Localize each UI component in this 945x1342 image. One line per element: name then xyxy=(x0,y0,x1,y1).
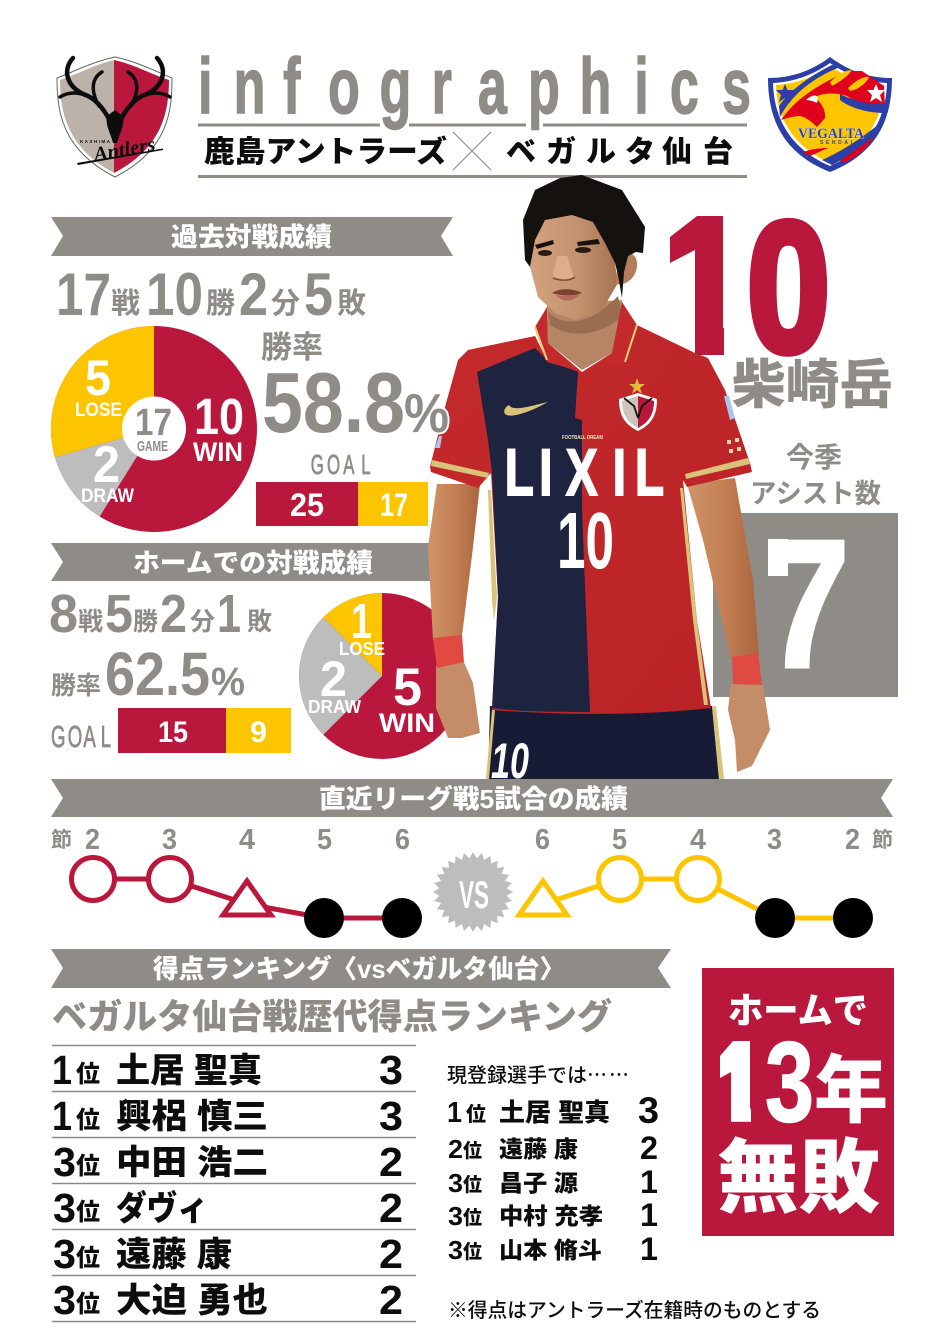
pie chart: home record: 1 xyxy=(351,595,372,649)
stat line: 8 home games record: 戦 xyxy=(78,608,103,636)
pie chart: home record: DRAW xyxy=(308,697,361,717)
stat line: 8 home games record: 8 xyxy=(49,584,78,644)
current row 2: 位 xyxy=(463,1140,482,1162)
row 4: 3 xyxy=(53,1185,76,1231)
current row 5: 1 xyxy=(640,1231,658,1267)
round number labels: 5 xyxy=(317,824,332,856)
row 6: 大迫 勇也 xyxy=(116,1282,268,1320)
round number labels: 3 xyxy=(162,824,177,856)
pie chart: overall record: WIN xyxy=(193,437,243,467)
stat line: 8 home games record xyxy=(49,584,272,644)
banner: past results: 過去対戦成績 xyxy=(171,222,332,252)
goal bar: 15 vs 9: GOAL xyxy=(51,720,111,754)
label: assists this season: アシスト数 xyxy=(750,479,881,509)
banner: scoring ranking: 得点ランキング〈vsベガルタ仙台〉 xyxy=(153,954,565,984)
banner: scoring ranking xyxy=(51,949,671,988)
pie chart: overall record: LOSE xyxy=(75,400,122,421)
banner: home results: ホームでの対戦成績 xyxy=(133,548,373,578)
shorts: 10 xyxy=(491,733,529,789)
round number labels: 3 xyxy=(767,824,782,856)
goals label: GOAL xyxy=(311,449,371,480)
round number labels: 6 xyxy=(395,824,410,856)
stat line: 8 home games record: 敗 xyxy=(247,608,272,636)
shirt sponsor LIXIL: LIXIL xyxy=(505,436,664,510)
row 2 xyxy=(52,1093,403,1139)
stat: home win rate: 勝率 xyxy=(51,672,101,700)
stat line: 17 games record: 10 xyxy=(146,261,203,328)
jersey xyxy=(430,325,752,714)
row 3: 3 xyxy=(53,1139,76,1185)
current row 4: 位 xyxy=(463,1207,482,1229)
pie chart: home record: 2 xyxy=(320,651,347,707)
stat line: 17 games record xyxy=(56,261,366,328)
footnote: ※得点はアントラーズ在籍時のものとする xyxy=(448,1299,821,1322)
pie chart: overall record: DRAW xyxy=(81,486,134,507)
current row 1: 3 xyxy=(638,1090,659,1131)
current row 4: 3 xyxy=(448,1201,463,1231)
current row 3: 昌子 源 xyxy=(499,1170,578,1196)
neck xyxy=(547,296,622,370)
stat line: 17 games record: 2 xyxy=(239,261,268,328)
stat line: 17 games record: 敗 xyxy=(337,287,366,320)
current row 2 xyxy=(448,1130,658,1166)
goal bar: 25 vs 17: 25 xyxy=(290,487,324,523)
current row 5: 3 xyxy=(448,1235,463,1265)
current row 2: 遠藤 康 xyxy=(499,1136,578,1162)
row 5: 位 xyxy=(76,1245,100,1272)
current row 1: 位 xyxy=(466,1103,486,1126)
pie chart: overall record: 2 xyxy=(93,436,120,494)
round number labels: 節 xyxy=(872,829,893,852)
row 1: 位 xyxy=(76,1061,100,1088)
table: current squad scorers xyxy=(447,1059,659,1267)
stat line: 8 home games record: 5 xyxy=(105,584,133,644)
player photo illustration xyxy=(428,175,770,789)
label: assists this season: 今季 xyxy=(786,442,842,473)
pie chart: overall record: GAME xyxy=(137,438,168,455)
assist count box: 7 xyxy=(713,501,898,706)
current row 5: 位 xyxy=(463,1241,482,1263)
round number labels: 2 xyxy=(845,824,860,856)
label: win rate: 勝率 xyxy=(261,330,323,365)
pie chart: home record: WIN xyxy=(379,708,435,738)
current row 1 xyxy=(447,1090,659,1131)
current row 3: 1 xyxy=(640,1164,658,1200)
stat: overall win rate: 58.8 xyxy=(262,356,405,451)
current row 1: 土居 聖真 xyxy=(499,1099,610,1127)
VS badge xyxy=(427,846,519,938)
stat line: 8 home games record: 2 xyxy=(160,584,187,644)
left arm xyxy=(428,484,480,738)
heading: all-time ranking: ベガルタ仙台戦歴代得点ランキング xyxy=(52,997,612,1037)
goal bar: 25 vs 17: 17 xyxy=(380,487,408,523)
pie chart: home record xyxy=(299,593,465,759)
row 2: 3 xyxy=(379,1093,403,1139)
table: current squad scorers: 現登録選手では…… xyxy=(447,1059,631,1088)
stat: home win rate: % xyxy=(211,660,245,704)
goal bar: 15 vs 9: 9 xyxy=(250,716,267,749)
row 6: 3 xyxy=(53,1277,76,1323)
crest: Vegalta Sendai xyxy=(768,57,892,172)
stat line: 17 games record: 勝 xyxy=(206,287,235,320)
table: all-time scorers xyxy=(52,1046,416,1323)
current row 4: 中村 充孝 xyxy=(499,1203,603,1229)
row 5: 3 xyxy=(53,1231,76,1277)
shorts xyxy=(486,706,724,789)
form line: Vegalta xyxy=(519,858,873,938)
row 5: 2 xyxy=(379,1231,403,1277)
callout: 13 years unbeaten at home: 13 xyxy=(716,1019,814,1146)
round number labels: 4 xyxy=(690,824,706,856)
banner: last 5 league games: 直近リーグ戦5試合の成績 xyxy=(319,784,628,814)
title: infographics: infographics xyxy=(198,42,751,131)
form line: Kashima xyxy=(72,858,422,938)
match-up heading: Kashima vs Vegalta xyxy=(204,132,733,170)
callout: 13 years unbeaten at home: 無敗 xyxy=(717,1134,880,1224)
banner: last 5 league games xyxy=(51,779,893,817)
callout: 13 years unbeaten at home: 年 xyxy=(814,1049,888,1132)
stat line: 17 games record: 戦 xyxy=(111,287,140,320)
current row 5 xyxy=(448,1231,658,1267)
stat: home win rate xyxy=(51,640,245,708)
callout: 13 years unbeaten at home: ホームで xyxy=(728,990,868,1031)
current row 5: 山本 脩斗 xyxy=(499,1237,602,1263)
right arm xyxy=(687,478,770,772)
row 1: 3 xyxy=(379,1047,403,1093)
round number labels xyxy=(51,824,893,856)
row 1: 1 xyxy=(52,1047,72,1093)
goal bar: 15 vs 9 xyxy=(51,708,291,754)
pie chart: home record: 5 xyxy=(393,658,422,717)
pie chart: overall record: 10 xyxy=(194,388,244,445)
row 3: 中田 浩二 xyxy=(116,1144,268,1182)
goal bar: 25 vs 17 xyxy=(256,482,428,526)
stat line: 17 games record: 5 xyxy=(304,261,333,328)
stat line: 17 games record: 17 xyxy=(56,261,111,328)
player number: 10: 10 xyxy=(664,185,830,391)
player name: 柴崎岳 xyxy=(732,356,893,415)
row 3: 位 xyxy=(76,1153,100,1180)
row 2: 1 xyxy=(52,1093,72,1139)
goal bar: 15 vs 9: 15 xyxy=(158,716,188,749)
current row 1: 1 xyxy=(447,1097,462,1129)
current row 4 xyxy=(448,1197,658,1233)
stat line: 17 games record: 分 xyxy=(271,287,300,320)
current row 3: 3 xyxy=(448,1168,463,1198)
pie chart: overall record: 5 xyxy=(85,350,111,406)
hair xyxy=(523,175,645,298)
current row 2: 2 xyxy=(640,1130,658,1166)
VS badge: VS xyxy=(459,874,489,917)
shirt number 10: 10 xyxy=(557,496,614,585)
stat: home win rate: 62.5 xyxy=(105,640,210,708)
current row 4: 1 xyxy=(640,1197,658,1233)
row 6: 2 xyxy=(379,1277,403,1323)
match-up heading: Kashima vs Vegalta: 鹿島アントラーズ xyxy=(204,135,447,169)
banner: home results xyxy=(51,543,453,581)
pie chart: home record: LOSE xyxy=(339,639,385,659)
crest: Kashima Antlers: Antlers xyxy=(90,133,157,166)
row 2: 興梠 慎三 xyxy=(116,1098,268,1136)
shirt details: swoosh, crest, star: FOOTBALL DREAM xyxy=(562,435,603,441)
stat line: 8 home games record: 勝 xyxy=(133,608,158,636)
label: assists this season xyxy=(750,442,881,509)
row 5: 遠藤 康 xyxy=(116,1236,232,1274)
assist count box: 7: 7 xyxy=(764,501,850,706)
pie chart: overall record: 17 xyxy=(135,402,172,444)
round number labels: 6 xyxy=(535,824,550,856)
row 4: 位 xyxy=(76,1199,100,1226)
row 6 xyxy=(53,1277,403,1323)
match-up heading: Kashima vs Vegalta: ベガルタ仙台 xyxy=(506,135,733,169)
crest: Kashima Antlers xyxy=(57,57,172,177)
crest: Kashima Antlers: KASHIMA xyxy=(80,139,111,144)
row 4: 2 xyxy=(379,1185,403,1231)
current row 2: 2 xyxy=(448,1134,463,1164)
shirt details: swoosh, crest, star xyxy=(435,378,741,453)
row 2: 位 xyxy=(76,1107,100,1134)
row 6: 位 xyxy=(76,1291,100,1318)
face xyxy=(530,212,637,320)
stat line: 8 home games record: 1 xyxy=(217,584,241,644)
current row 3: 位 xyxy=(463,1174,482,1196)
row 4 xyxy=(53,1185,403,1231)
row 3: 2 xyxy=(379,1139,403,1185)
callout: 13 years unbeaten at home xyxy=(702,968,894,1236)
stat line: 8 home games record: 分 xyxy=(190,608,215,636)
crest: Vegalta Sendai: SENDAI xyxy=(820,140,853,146)
stat: overall win rate: % xyxy=(404,382,449,444)
row 5 xyxy=(53,1231,403,1277)
round number labels: 節 xyxy=(51,829,72,852)
round number labels: 4 xyxy=(239,824,255,856)
row 3 xyxy=(53,1139,403,1185)
round number labels: 2 xyxy=(85,824,100,856)
crest: Vegalta Sendai: VEGALTA xyxy=(798,126,864,142)
pie chart: overall record xyxy=(51,326,257,532)
row 4: ダヴィ xyxy=(116,1189,208,1228)
banner: past results xyxy=(51,217,453,256)
row 1: 土居 聖真 xyxy=(116,1052,262,1090)
current row 3 xyxy=(448,1164,658,1200)
round number labels: 5 xyxy=(612,824,627,856)
title rules xyxy=(198,124,747,178)
row 1 xyxy=(52,1047,403,1093)
collar xyxy=(535,302,637,372)
